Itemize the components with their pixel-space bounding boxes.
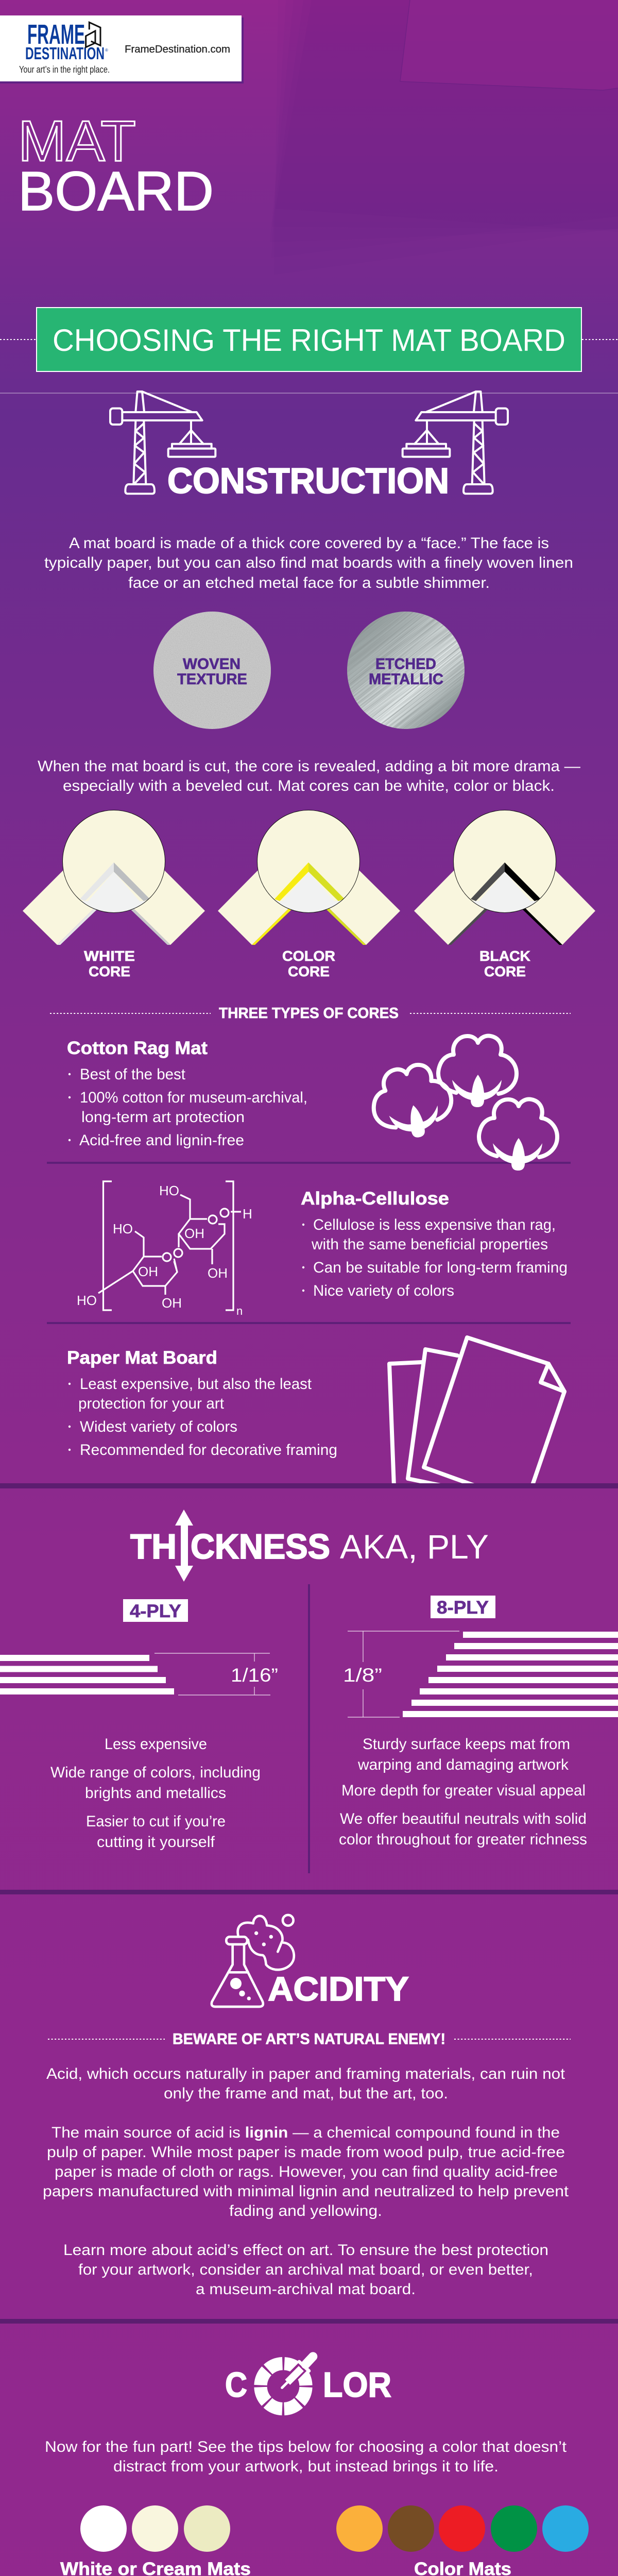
ply diagram: 1/16” [231,1665,278,1686]
panel: alpha-cellulose: Alpha-Cellulose [301,1189,449,1209]
label: CORE [288,963,330,979]
text: color intro: distract from your artwork, but instead brings it to life. [113,2458,499,2475]
panel: cotton rag mat [67,1038,307,1149]
panel: 4-ply [0,1599,278,1851]
text: acid paragraph 2: fading and yellowing. [229,2202,382,2219]
ply diagram: 1/8” [343,1665,382,1686]
icon: double arrow [175,1510,193,1582]
heading: acidity: ACIDITY [268,1970,409,2008]
diagram: cellulose structure: OH [138,1264,158,1279]
bullet list: with the same beneficial properties [311,1236,548,1253]
text: acid paragraph 2: The main source of acid is lignin — a chemical compound found in the [52,2124,560,2141]
icon: cotton bolls [366,1036,557,1171]
icon: door [86,22,100,47]
icon: crane right [403,392,508,494]
diagram: cellulose structure: HO [159,1183,179,1198]
text: acid paragraph 3: Learn more about acid’s effect on art. To ensure the best protection [63,2242,548,2259]
banner: choosing the right mat board: CHOOSING THE RIGHT MAT BOARD [53,323,565,358]
heading: color [225,2357,391,2409]
banner: choosing the right mat board [37,308,581,371]
text: acid paragraph 1: Acid, which occurs naturally in paper and framing materials, can ruin not [46,2065,565,2082]
text block: Easier to cut if you’re [86,1813,226,1830]
panel: alpha-cellulose [301,1189,568,1299]
swatches [336,2505,589,2552]
swatch: woven texture: TEXTURE [177,671,247,688]
bullet list: Can be suitable for long-term framing [313,1259,568,1276]
ply diagram [0,1653,278,1695]
heading: construction: CONSTRUCTION [167,461,449,501]
panel: white or cream mats [32,2505,280,2576]
logo wordmark: FRAME [27,19,85,50]
text: core intro [38,758,581,794]
text block: brights and metallics [85,1785,226,1802]
diagram: cellulose structure [77,1181,252,1317]
bullet list: Widest variety of colors [80,1418,237,1435]
icon: crane left [110,392,215,494]
label [282,948,335,979]
label [84,948,135,979]
panel: color mats [332,2505,594,2576]
logo wordmark [25,19,108,63]
subheading: beware: BEWARE OF ART’S NATURAL ENEMY! [173,2031,445,2047]
text: acid paragraph 2 [43,2124,569,2219]
diagram: cellulose structure: H [243,1206,252,1222]
bullet list: Acid-free and lignin-free [79,1132,244,1149]
text block: warping and damaging artwork [357,1756,569,1773]
bullet list: Best of the best [80,1066,185,1083]
text: acid paragraph 3: for your artwork, consider an archival mat board, or even better, [78,2261,533,2278]
text: core intro: especially with a beveled cut. Mat cores can be white, color or black. [63,777,555,794]
bullet list [302,1216,568,1299]
swatch: etched metallic [347,612,465,729]
panel: 4-ply: 4-PLY [130,1601,181,1621]
heading: thickness aka ply: TH [130,1527,177,1566]
bullet list: Nice variety of colors [313,1282,454,1299]
bullet list: protection for your art [78,1395,224,1412]
title: BOARD [18,160,214,222]
diagram: white core [23,810,205,979]
bullet list [68,1376,337,1459]
text block: More depth for greater visual appeal [341,1782,586,1799]
logo wordmark: DESTINATION [25,44,105,63]
text: acid paragraph 2: paper is made of cloth or rags. However, you can find quality acid-free [55,2163,558,2180]
bullet list: Cellulose is less expensive than rag, [313,1216,556,1233]
label: WHITE [84,948,135,964]
bullet list: long-term art protection [81,1109,245,1126]
diagram: cellulose structure: OH [162,1295,182,1311]
background paper stack [270,0,618,275]
panel: 8-ply: 8-PLY [437,1598,489,1618]
diagram: cellulose structure: n [236,1304,243,1317]
label: CORE [484,963,526,979]
diagram: cellulose structure: OH [208,1265,228,1281]
text block: Sturdy surface keeps mat from [363,1736,570,1753]
text: color intro: Now for the fun part! See the tips below for choosing a color that doesn’t [45,2438,566,2455]
bullet list: Recommended for decorative framing [80,1442,337,1459]
diagram: black core [414,810,595,979]
bullet list [68,1066,307,1149]
text: acid paragraph 3: a museum-archival mat board. [196,2281,416,2298]
swatch: etched metallic: ETCHED [375,655,436,673]
label [479,948,530,979]
swatch: etched metallic: METALLIC [369,671,443,688]
heading: thickness aka ply: CKNESS [191,1527,330,1566]
logo wordmark: ® [105,48,108,53]
bullet list: Least expensive, but also the least [80,1376,312,1393]
ply diagram [343,1631,618,1717]
text: construction intro: face or an etched metal face for a subtle shimmer. [128,574,490,591]
diagram: color core [218,810,400,979]
diagram: cellulose structure: HO [113,1221,133,1236]
text block: color throughout for greater richness [339,1831,587,1848]
text: acid paragraph 1 [46,2065,565,2102]
heading: color: C [225,2365,247,2404]
panel: cotton rag mat: Cotton Rag Mat [67,1038,208,1058]
text: acid paragraph 2: papers manufactured with minimal lignin and neutralized to help prevent [43,2183,569,2200]
text block: We offer beautiful neutrals with solid [340,1810,587,1827]
text block [50,1736,261,1851]
text: acid paragraph 1: only the frame and mat, but the art, too. [164,2085,448,2102]
subheading: three types of cores: THREE TYPES OF CORES [219,1005,399,1022]
text: construction intro: typically paper, but you can also find mat boards with a finely woven linen [44,554,573,571]
icon: flask [212,1915,294,2007]
title [18,109,214,222]
text block: Less expensive [105,1736,207,1753]
text: acid paragraph 2: pulp of paper. While most paper is made from wood pulp, true acid-free [47,2144,565,2161]
title: MAT [18,109,136,173]
panel: paper mat board: Paper Mat Board [67,1348,217,1368]
bullet list: 100% cotton for museum-archival, [80,1089,307,1106]
text block [339,1736,587,1848]
heading: color: LOR [323,2365,391,2404]
label: BLACK [479,948,530,964]
swatch: woven texture: WOVEN [183,655,241,673]
swatch: woven texture [153,612,271,729]
diagram: cellulose structure: HO [77,1293,97,1308]
text block: Wide range of colors, including [50,1764,261,1781]
header logo panel [0,15,244,83]
heading: thickness aka ply [130,1510,489,1582]
tagline: Your art’s in the right place. [19,64,110,75]
heading: thickness aka ply: AKA, PLY [340,1528,489,1566]
text: construction intro [44,535,573,591]
icon: paper sheets [389,1337,564,1486]
panel: paper mat board [67,1348,337,1459]
icon: color wheel and dropper [261,2357,313,2409]
swatches [80,2505,230,2552]
diagram: cellulose structure: OH [184,1226,204,1241]
panel: 8-ply [339,1596,618,1848]
label: CORE [89,963,130,979]
text: core intro: When the mat board is cut, the core is revealed, adding a bit more drama — [38,758,581,775]
text: color intro [45,2438,566,2475]
label: COLOR [282,948,335,964]
text: construction intro: A mat board is made of a thick core covered by a “face.” The face is [69,535,549,552]
logo url: FrameDestination.com [125,44,230,55]
text: acid paragraph 3 [63,2242,548,2298]
text block: cutting it yourself [97,1834,215,1851]
